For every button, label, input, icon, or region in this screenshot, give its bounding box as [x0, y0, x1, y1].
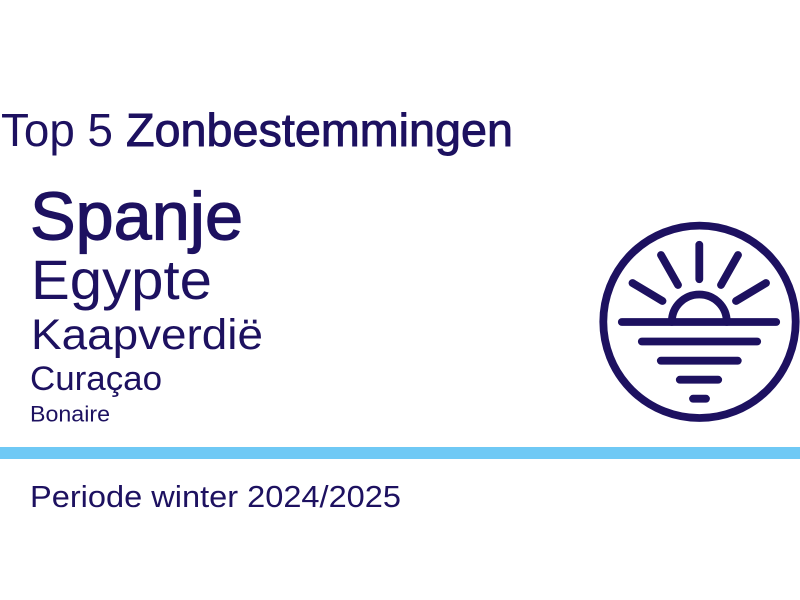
- title: Zonbestemmingen: [126, 104, 513, 156]
- destination 4: Curaçao: Curaçao: [30, 360, 162, 398]
- period note: Periode winter 2024/2025: [30, 479, 401, 514]
- icon: sun setting over water in a circle: [603, 226, 796, 418]
- title: Top 5: [1, 104, 113, 156]
- destination 1: Spanje: Spanje: [30, 178, 243, 254]
- destination 5: Bonaire: Bonaire: [30, 402, 110, 426]
- destination 3: Kaapverdië: Kaapverdië: [31, 311, 263, 359]
- destination 2: Egypte: Egypte: [31, 248, 212, 311]
- light blue divider bar: [0, 447, 800, 459]
- ranked destinations list: [30, 178, 263, 426]
